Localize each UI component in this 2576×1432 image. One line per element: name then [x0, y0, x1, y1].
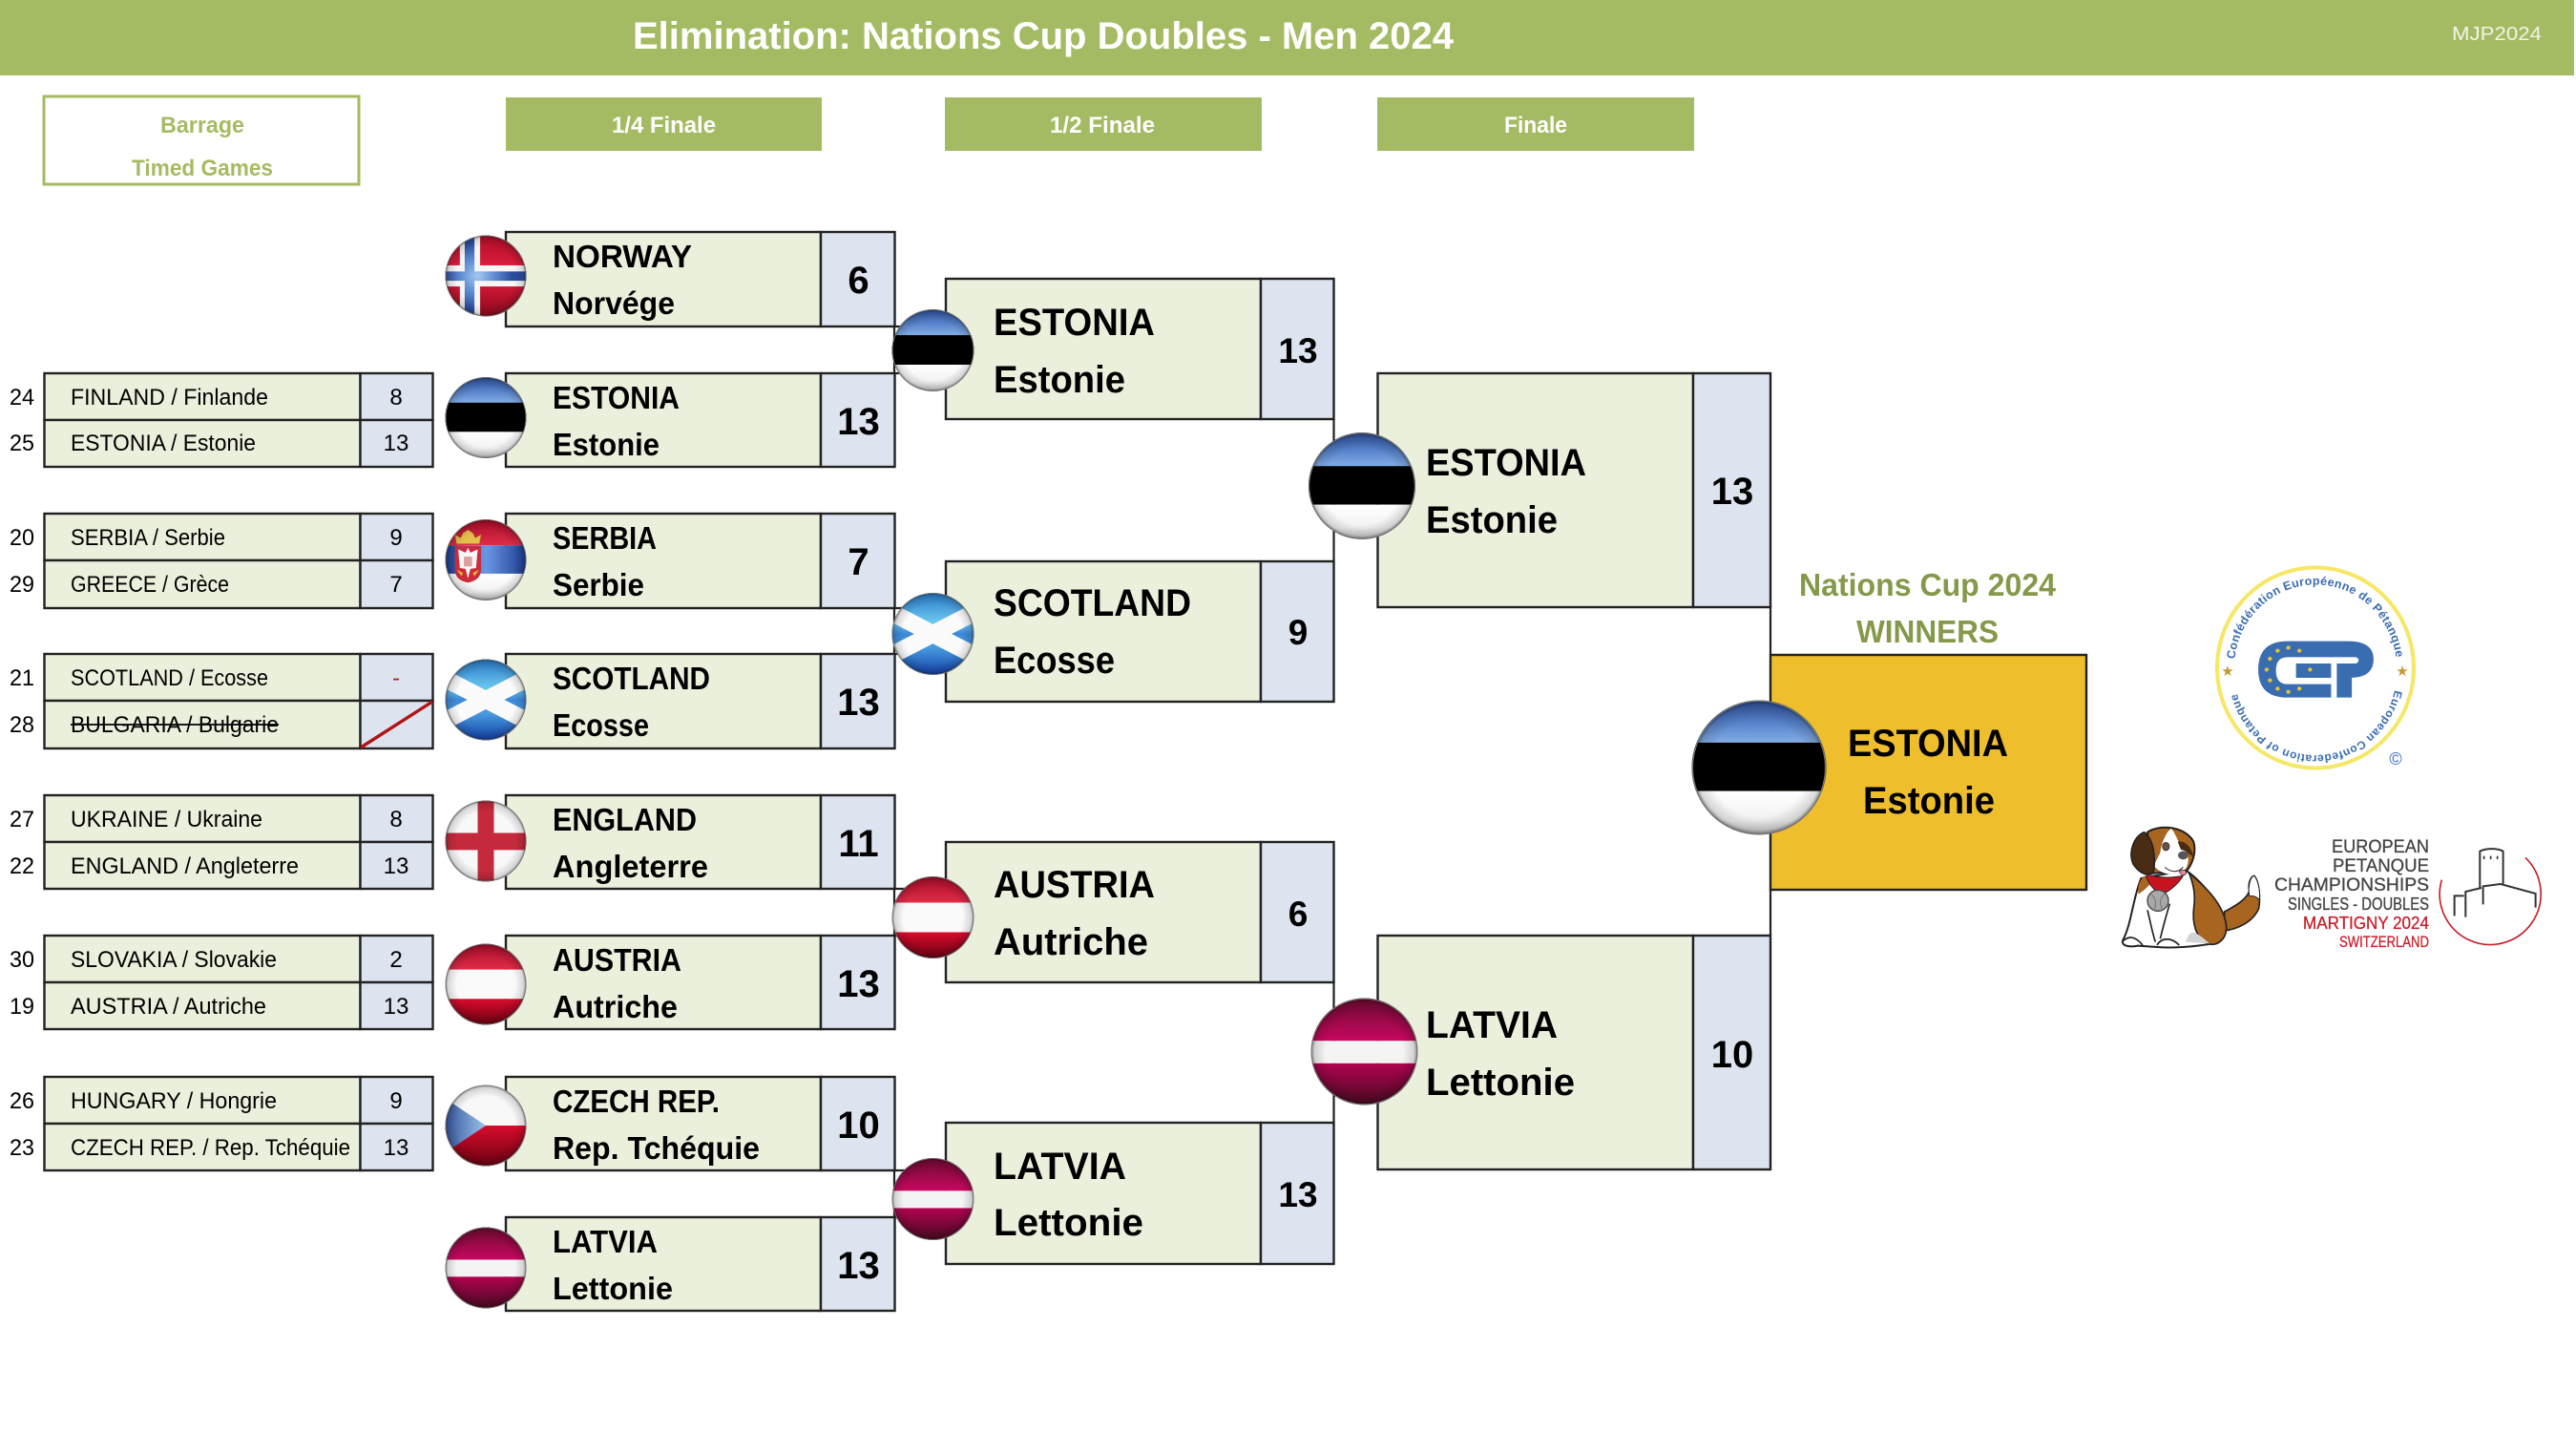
flag: Norway	[445, 235, 527, 317]
winner box	[1770, 655, 2086, 890]
final: Latvia	[1378, 936, 1770, 1169]
winner box: ESTONIA	[1848, 723, 2008, 765]
logo: European Confederation of Petanque: European Confederation of Petanque	[2231, 691, 2402, 764]
flag: Estonia semi	[891, 309, 974, 391]
semi final: Latvia: LATVIA	[994, 1146, 1126, 1188]
flag: Scotland quarter	[437, 659, 534, 741]
semi final: Estonia	[946, 279, 1334, 419]
quarter final: Latvia	[506, 1217, 895, 1311]
quarter final: Latvia: LATVIA	[553, 1224, 658, 1259]
winners heading: WINNERS	[1856, 614, 1999, 649]
column heading: barrage: Barrage	[160, 113, 244, 138]
final: Latvia: LATVIA	[1426, 1004, 1558, 1046]
winner box: Estonie	[1863, 780, 1995, 822]
semi final: Scotland	[946, 561, 1334, 702]
barrage match: Scotland v Bulgaria (forfeit): -	[392, 665, 400, 691]
semi final: Estonia: 13	[1278, 331, 1318, 370]
column heading: semi finals	[945, 97, 1262, 151]
final: Estonia: ESTONIA	[1426, 442, 1586, 484]
flag: Czech Rep.	[437, 1085, 527, 1167]
quarter final: Austria: Autriche	[553, 989, 678, 1024]
barrage match: Hungary v Czech Rep.: HUNGARY / Hongrie	[71, 1088, 277, 1114]
barrage match: Scotland v Bulgaria (forfeit): SCOTLAND / Ecosse	[71, 665, 268, 691]
barrage match: Finland v Estonia: 13	[384, 431, 408, 456]
semi final: Estonia: Estonie	[994, 359, 1125, 401]
quarter final: England	[506, 795, 895, 889]
flag: Estonia quarter	[445, 377, 527, 458]
body	[2123, 871, 2224, 948]
barrage match: Serbia v Greece: SERBIA / Serbie	[71, 525, 225, 551]
quarter final: Serbia	[506, 514, 895, 608]
barrage match: Slovakia v Austria: 30	[10, 947, 34, 973]
logo: European Confederation of Petanque: Confédération Européenne de Pétanque	[2227, 577, 2402, 659]
quarter final: Austria	[506, 936, 895, 1029]
flag: Latvia semi	[891, 1158, 974, 1241]
barrage match: Hungary v Czech Rep.: CZECH REP. / Rep. Tchéquie	[71, 1135, 350, 1161]
quarter final: Norway: NORWAY	[553, 239, 692, 274]
quarter final: England: Angleterre	[553, 849, 708, 884]
final: Estonia	[1378, 373, 1770, 607]
quarter final: Estonia: 13	[837, 401, 880, 443]
logo: championships wordmark: EUROPEAN	[2332, 837, 2429, 857]
quarter final: Norway: 6	[848, 260, 869, 302]
logo: European Confederation of Petanque: ★	[2221, 663, 2234, 680]
column heading: barrage: Timed Games	[132, 156, 273, 181]
flag: Serbia	[445, 519, 527, 600]
logo: championships wordmark: SINGLES - DOUBLES	[2288, 895, 2429, 914]
flag: Estonia final	[1309, 432, 1415, 540]
barrage match: Ukraine v England: UKRAINE / Ukraine	[71, 807, 262, 832]
final: Latvia: 10	[1711, 1034, 1753, 1076]
barrage match: Hungary v Czech Rep.: 23	[10, 1135, 34, 1161]
quarter final: Scotland	[506, 654, 895, 748]
flag: Scotland semi	[884, 593, 982, 675]
barrage match: Scotland v Bulgaria (forfeit): 28	[10, 712, 34, 738]
flag: Estonia winner	[1691, 701, 1827, 835]
barrage match: Hungary v Czech Rep.: 13	[384, 1135, 408, 1161]
quarter final: Serbia: SERBIA	[553, 520, 657, 556]
quarter final: Estonia: ESTONIA	[553, 380, 680, 415]
column heading: semi finals: 1/2 Finale	[1050, 113, 1155, 138]
semi final: Scotland: 9	[1288, 613, 1308, 652]
barrage match: Finland v Estonia: ESTONIA / Estonie	[71, 431, 256, 456]
logo: championships wordmark: SWITZERLAND	[2339, 933, 2429, 951]
final: Latvia: Lettonie	[1426, 1062, 1575, 1104]
logo: European Confederation of Petanque: ★	[2396, 663, 2409, 680]
head	[2147, 828, 2194, 874]
logo: European Confederation of Petanque: ©	[2389, 749, 2402, 769]
quarter final: Serbia: Serbie	[553, 567, 644, 602]
quarter final: England: 11	[838, 823, 879, 865]
quarter final: Austria: AUSTRIA	[553, 942, 681, 978]
semi final: Estonia: ESTONIA	[994, 302, 1155, 344]
barrage match: Hungary v Czech Rep.	[10, 1077, 433, 1170]
header banner	[0, 0, 2574, 75]
mascot: St Bernard dog	[2122, 828, 2260, 948]
flag: Austria semi	[891, 876, 974, 958]
barrage match: Ukraine v England	[10, 795, 433, 889]
quarter final: Latvia: Lettonie	[553, 1271, 673, 1306]
winners heading: Nations Cup 2024	[1799, 567, 2057, 602]
tail	[2225, 875, 2259, 931]
quarter final: England: ENGLAND	[553, 802, 697, 837]
barrage match: Serbia v Greece: GREECE / Grèce	[71, 572, 229, 598]
quarter final: Scotland: 13	[837, 682, 880, 724]
barrage match: Slovakia v Austria: 2	[389, 947, 403, 973]
barrage match: Serbia v Greece: 29	[10, 572, 34, 598]
barrage match: Ukraine v England: 8	[389, 807, 403, 832]
quarter final: Norway: Norvége	[553, 285, 675, 321]
winners heading	[1799, 567, 2057, 649]
quarter final: Scotland: SCOTLAND	[553, 661, 710, 696]
flag: Latvia final	[1311, 999, 1418, 1106]
quarter final: Serbia: 7	[848, 541, 869, 583]
logo: castle in red circle	[2440, 849, 2541, 944]
semi final: Austria: 6	[1288, 895, 1308, 934]
quarter final: Scotland: Ecosse	[553, 707, 649, 743]
quarter final: Czech Rep.	[506, 1077, 895, 1170]
barrage match: Slovakia v Austria: AUSTRIA / Autriche	[71, 994, 266, 1020]
barrage match: Scotland v Bulgaria (forfeit): BULGARIA / Bulgarie	[71, 712, 279, 738]
column heading: final: Finale	[1504, 113, 1567, 138]
column heading: barrage	[44, 96, 359, 184]
flag: England	[445, 800, 527, 882]
barrage match: Finland v Estonia: 25	[10, 431, 34, 456]
medal ball	[2147, 890, 2168, 911]
credit: MJP2024	[2452, 24, 2542, 45]
barrage match: Finland v Estonia: 8	[389, 385, 403, 411]
semi final: Scotland: Ecosse	[994, 640, 1115, 682]
barrage match: Ukraine v England: 13	[384, 853, 408, 879]
bracket connectors	[894, 326, 1770, 1217]
barrage match: Slovakia v Austria: 13	[384, 994, 408, 1020]
logo: championships wordmark	[2274, 837, 2429, 951]
column heading: quarter finals	[506, 97, 822, 151]
barrage match: Serbia v Greece: 20	[10, 525, 34, 551]
barrage match: Finland v Estonia: FINLAND / Finlande	[71, 385, 268, 411]
barrage match: Ukraine v England: 27	[10, 807, 34, 832]
quarter final: Norway	[506, 232, 895, 326]
logo: championships wordmark: MARTIGNY 2024	[2303, 914, 2429, 933]
quarter final: Austria: 13	[837, 963, 880, 1005]
final: Estonia: 13	[1711, 471, 1753, 513]
quarter final: Estonia	[506, 373, 895, 467]
logo: European Confederation of Petanque	[2215, 565, 2416, 769]
flag: Austria quarter	[445, 943, 527, 1025]
barrage match: Hungary v Czech Rep.: 26	[10, 1088, 34, 1114]
barrage match: Ukraine v England: ENGLAND / Angleterre	[71, 853, 299, 879]
barrage match: Ukraine v England: 22	[10, 853, 34, 879]
title: Elimination: Nations Cup Doubles - Men 2024	[633, 15, 1455, 57]
quarter final: Czech Rep.: Rep. Tchéquie	[553, 1130, 760, 1166]
barrage match: Finland v Estonia	[10, 373, 433, 467]
quarter final: Estonia: Estonie	[553, 427, 660, 462]
semi final: Austria: Autriche	[994, 921, 1148, 963]
column heading: final	[1377, 97, 1694, 151]
bandana	[2146, 874, 2183, 895]
semi final: Latvia: 13	[1278, 1175, 1318, 1214]
semi final: Scotland: SCOTLAND	[994, 582, 1191, 624]
semi final: Latvia: Lettonie	[994, 1202, 1143, 1244]
barrage match: Slovakia v Austria: 19	[10, 994, 34, 1020]
semi final: Austria	[946, 842, 1334, 982]
barrage match: Finland v Estonia: 24	[10, 385, 34, 411]
column heading: quarter finals: 1/4 Finale	[612, 113, 716, 138]
barrage match: Slovakia v Austria: SLOVAKIA / Slovakie	[71, 947, 277, 973]
barrage match: Serbia v Greece: 7	[389, 572, 403, 598]
barrage match: Serbia v Greece	[10, 514, 433, 608]
barrage match: Scotland v Bulgaria (forfeit)	[10, 654, 433, 748]
barrage match: Slovakia v Austria	[10, 936, 433, 1029]
quarter final: Latvia: 13	[837, 1245, 880, 1287]
flag: Latvia quarter	[445, 1228, 527, 1309]
semi final: Austria: AUSTRIA	[994, 864, 1155, 906]
barrage match: Serbia v Greece: 9	[389, 525, 403, 551]
semi final: Latvia	[946, 1123, 1334, 1264]
final: Estonia: Estonie	[1426, 499, 1558, 541]
barrage match: Scotland v Bulgaria (forfeit): 21	[10, 665, 34, 691]
quarter final: Czech Rep.: 10	[837, 1105, 880, 1147]
logo: championships wordmark: PETANQUE	[2333, 856, 2429, 876]
logo: championships wordmark: CHAMPIONSHIPS	[2274, 875, 2429, 895]
barrage match: Hungary v Czech Rep.: 9	[389, 1088, 403, 1114]
quarter final: Czech Rep.: CZECH REP.	[553, 1084, 720, 1119]
